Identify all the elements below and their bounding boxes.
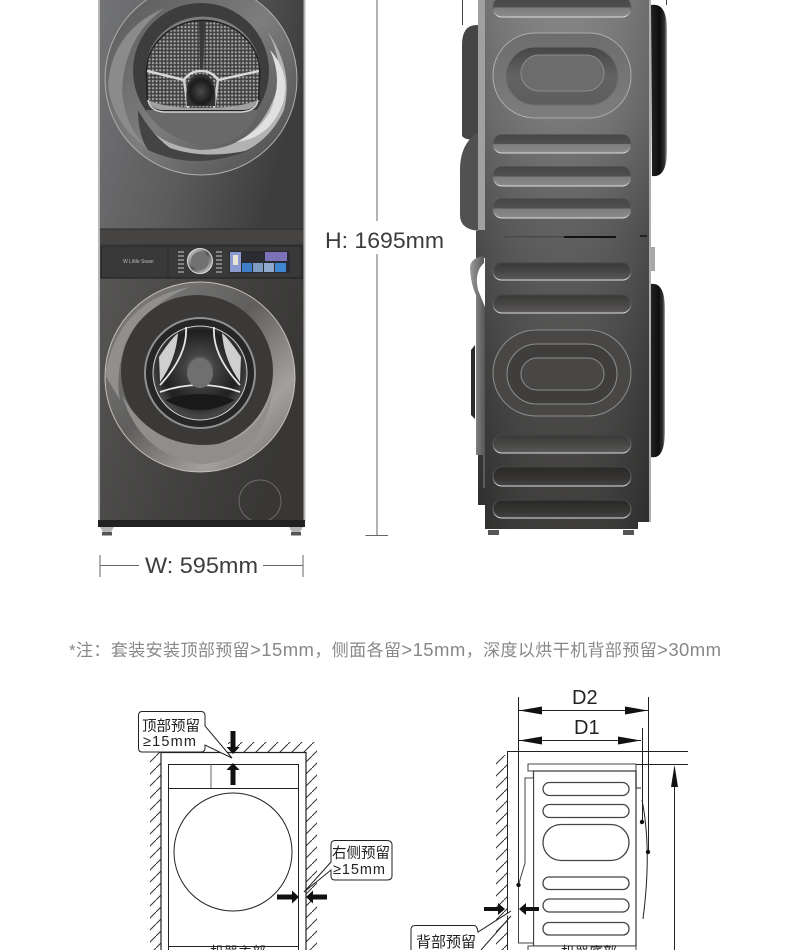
washer door ring bbox=[105, 282, 295, 472]
left door lower bbox=[471, 345, 475, 419]
dryer drum window bbox=[145, 20, 263, 114]
top clearance arrows bbox=[226, 731, 240, 785]
ribs lower bbox=[493, 263, 631, 518]
side cabinet bbox=[476, 0, 651, 529]
width dimension bbox=[100, 553, 303, 578]
dimension D1 bbox=[519, 717, 642, 822]
touch display bbox=[229, 251, 290, 273]
stacking seam bbox=[504, 235, 647, 238]
washer drum window bbox=[145, 318, 255, 428]
wall outline bbox=[161, 752, 306, 950]
dryer cabinet bbox=[98, 0, 305, 230]
ribs upper bbox=[493, 0, 631, 218]
front view: stacked dryer and washer bbox=[98, 0, 305, 536]
height arrow bbox=[671, 765, 678, 950]
control dial bbox=[188, 248, 212, 274]
dimension D2 bbox=[518, 687, 648, 885]
feet bbox=[488, 530, 634, 535]
detergent door outline bbox=[239, 480, 281, 522]
top clearance callout: ≥15mm bbox=[143, 734, 196, 750]
wall hatching bbox=[150, 742, 317, 950]
dimension D1: D1 bbox=[574, 717, 600, 739]
dryer drum hub bbox=[186, 74, 215, 106]
upper large oval bbox=[493, 33, 631, 118]
side clearance diagram bbox=[411, 687, 688, 950]
installation note: *注：套装安装顶部预留>15mm，侧面各留>15mm，深度以烘干机背部预留>30mm bbox=[69, 639, 721, 660]
height label: H: 1695mm bbox=[325, 228, 444, 253]
top clearance callout bbox=[138, 712, 232, 758]
right clearance arrows bbox=[277, 890, 327, 904]
machine ribs bbox=[543, 782, 629, 935]
width label: W: 595mm bbox=[145, 553, 258, 578]
control panel bbox=[101, 246, 302, 278]
top drum bulge right bbox=[651, 5, 667, 176]
front clearance diagram bbox=[138, 712, 392, 950]
lower large oval bbox=[493, 330, 631, 416]
dimension D2: D2 bbox=[572, 687, 598, 709]
machine door circle bbox=[174, 793, 292, 911]
machine outline bbox=[168, 764, 298, 950]
brand logo: W Little Swan bbox=[123, 259, 154, 265]
right clearance callout bbox=[304, 840, 392, 892]
washer cabinet bbox=[98, 245, 305, 524]
program labels bbox=[178, 252, 222, 272]
top door bulge left bbox=[462, 25, 478, 140]
dryer door ring bbox=[105, 0, 297, 175]
height dimension line bbox=[366, 0, 666, 536]
side view: stacked machines bbox=[460, 0, 667, 535]
lower drum bulge right bbox=[651, 284, 665, 457]
machine side outline bbox=[518, 764, 647, 950]
right clearance callout: 右侧预留 bbox=[332, 845, 390, 862]
pivot dots bbox=[516, 820, 650, 887]
hose bbox=[470, 256, 485, 488]
wall and hatching bbox=[496, 752, 688, 950]
side knobs bbox=[650, 247, 655, 271]
right clearance callout: ≥15mm bbox=[333, 862, 385, 878]
rear clearance arrows bbox=[484, 903, 539, 915]
top clearance callout: 顶部预留 bbox=[142, 718, 200, 735]
rear clearance callout bbox=[411, 911, 511, 950]
base and feet bbox=[98, 520, 305, 536]
silver cabinet edges bbox=[99, 0, 304, 521]
seam between machines bbox=[99, 229, 304, 245]
